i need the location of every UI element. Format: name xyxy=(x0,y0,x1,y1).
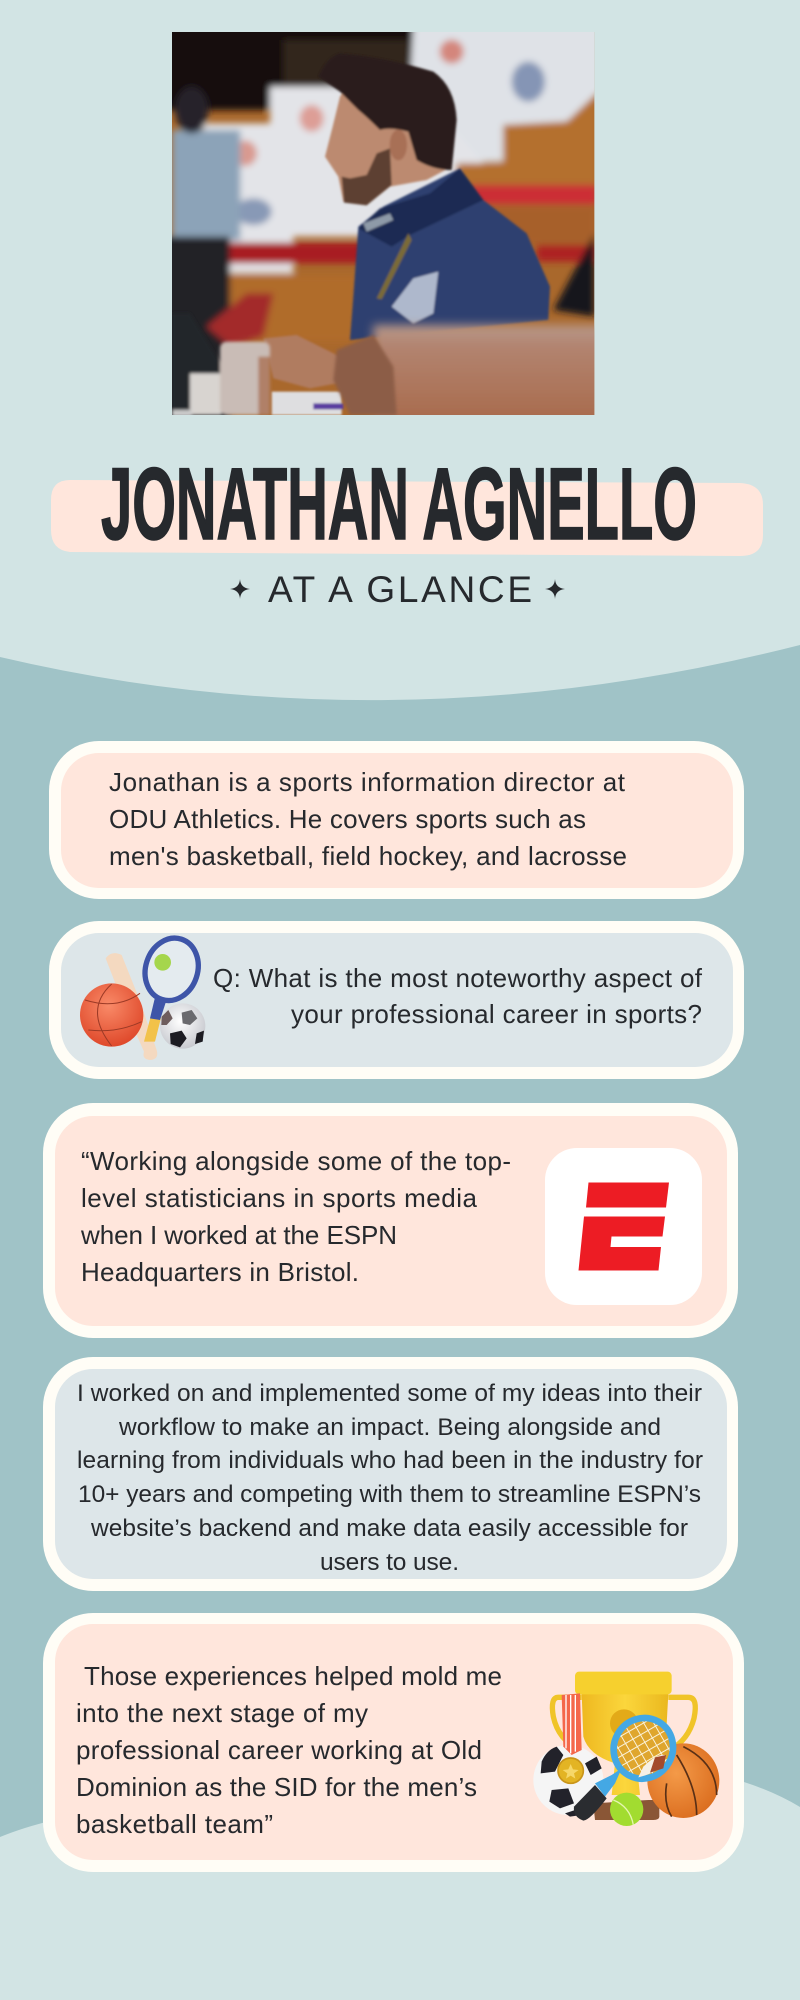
quote text xyxy=(80,1146,511,1287)
photo: Jonathan at the scorer's table xyxy=(172,32,594,415)
intro text: Jonathan is a sports information director at xyxy=(109,767,626,797)
impact text: workflow to make an impact. Being alongside and xyxy=(118,1414,661,1441)
closing text: basketball team” xyxy=(76,1809,273,1839)
impact text: I worked on and implemented some of my ideas into their xyxy=(77,1380,702,1407)
closing text: Those experiences helped mold me xyxy=(84,1661,502,1691)
impact text: website’s backend and make data easily accessible for xyxy=(90,1515,688,1542)
quote text: when I worked at the ESPN xyxy=(80,1220,397,1250)
intro text xyxy=(109,767,627,871)
impact text: users to use. xyxy=(320,1549,459,1576)
icon: sports balls and racket xyxy=(80,931,206,1060)
closing text: professional career working at Old xyxy=(76,1735,482,1765)
closing text xyxy=(76,1661,502,1839)
question text: your professional career in sports? xyxy=(291,999,702,1029)
impact text: learning from individuals who had been in the industry for xyxy=(77,1447,703,1474)
subtitle: at a glance with stars: AT A GLANCE xyxy=(268,569,532,610)
intro text: men's basketball, field hockey, and lacrosse xyxy=(109,841,627,871)
question text: Q: What is the most noteworthy aspect of xyxy=(213,963,703,993)
quote text: “Working alongside some of the top- xyxy=(81,1146,511,1176)
panel: closing quote xyxy=(43,1613,744,1872)
panel: intro xyxy=(49,741,744,899)
icon: ESPN logo tile xyxy=(545,1148,702,1305)
intro text: ODU Athletics. He covers sports such as xyxy=(109,804,586,834)
panel: question xyxy=(49,921,744,1079)
quote text: Headquarters in Bristol. xyxy=(81,1257,359,1287)
icon: trophy, balls, medal and racket xyxy=(533,1672,719,1826)
impact text xyxy=(77,1380,703,1576)
title highlight brush stroke xyxy=(51,480,763,556)
closing text: Dominion as the SID for the men’s xyxy=(76,1772,477,1802)
impact text: 10+ years and competing with them to streamline ESPN’s xyxy=(78,1481,701,1508)
panel: ESPN impact xyxy=(43,1357,738,1591)
question text xyxy=(213,963,703,1029)
panel: quote with ESPN logo xyxy=(43,1103,738,1338)
closing text: into the next stage of my xyxy=(76,1698,368,1728)
quote text: level statisticians in sports media xyxy=(81,1183,478,1213)
